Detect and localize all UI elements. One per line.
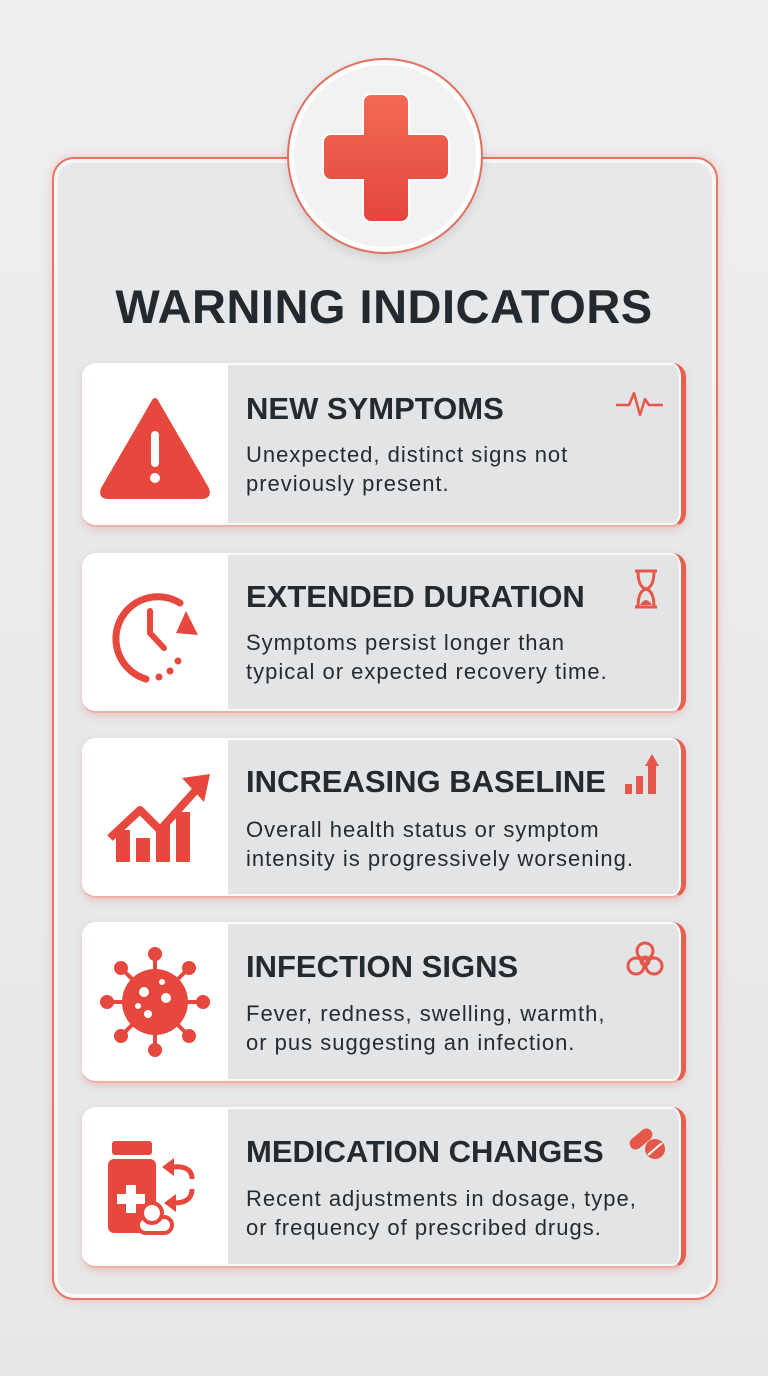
icon: hourglass [635, 570, 657, 608]
card: extended duration: typical or expected recovery time. [246, 659, 608, 684]
card: medication changes: or frequency of prescribed drugs. [246, 1215, 602, 1240]
card: infection signs: or pus suggesting an infection. [246, 1030, 575, 1055]
card: medication changes: MEDICATION CHANGES [246, 1134, 604, 1169]
card: increasing baseline: INCREASING BASELINE [246, 764, 606, 799]
card: medication changes: Recent adjustments in dosage, type, [246, 1186, 637, 1211]
card: increasing baseline: Overall health status or symptom [246, 817, 600, 842]
icon: medical cross badge [287, 58, 483, 254]
title: WARNING INDICATORS [115, 280, 653, 333]
card: extended duration [82, 553, 686, 713]
card: extended duration: EXTENDED DURATION [246, 579, 585, 614]
card: medication changes [82, 1107, 686, 1268]
icon: rising bars [625, 754, 659, 794]
card: new symptoms: previously present. [246, 471, 450, 496]
icon: pills [630, 1128, 665, 1159]
card: new symptoms [82, 363, 686, 527]
main panel [52, 157, 718, 1300]
icon: heartbeat [616, 392, 663, 416]
card: infection signs: INFECTION SIGNS [246, 949, 518, 984]
card: increasing baseline [82, 738, 686, 898]
icon: biohazard [626, 942, 664, 976]
card: new symptoms: Unexpected, distinct signs not [246, 442, 568, 467]
card: extended duration: Symptoms persist longer than [246, 630, 565, 655]
card: new symptoms: NEW SYMPTOMS [246, 391, 504, 426]
card: infection signs [82, 922, 686, 1083]
card: increasing baseline: intensity is progressively worsening. [246, 846, 634, 871]
card: infection signs: Fever, redness, swelling, warmth, [246, 1001, 605, 1026]
